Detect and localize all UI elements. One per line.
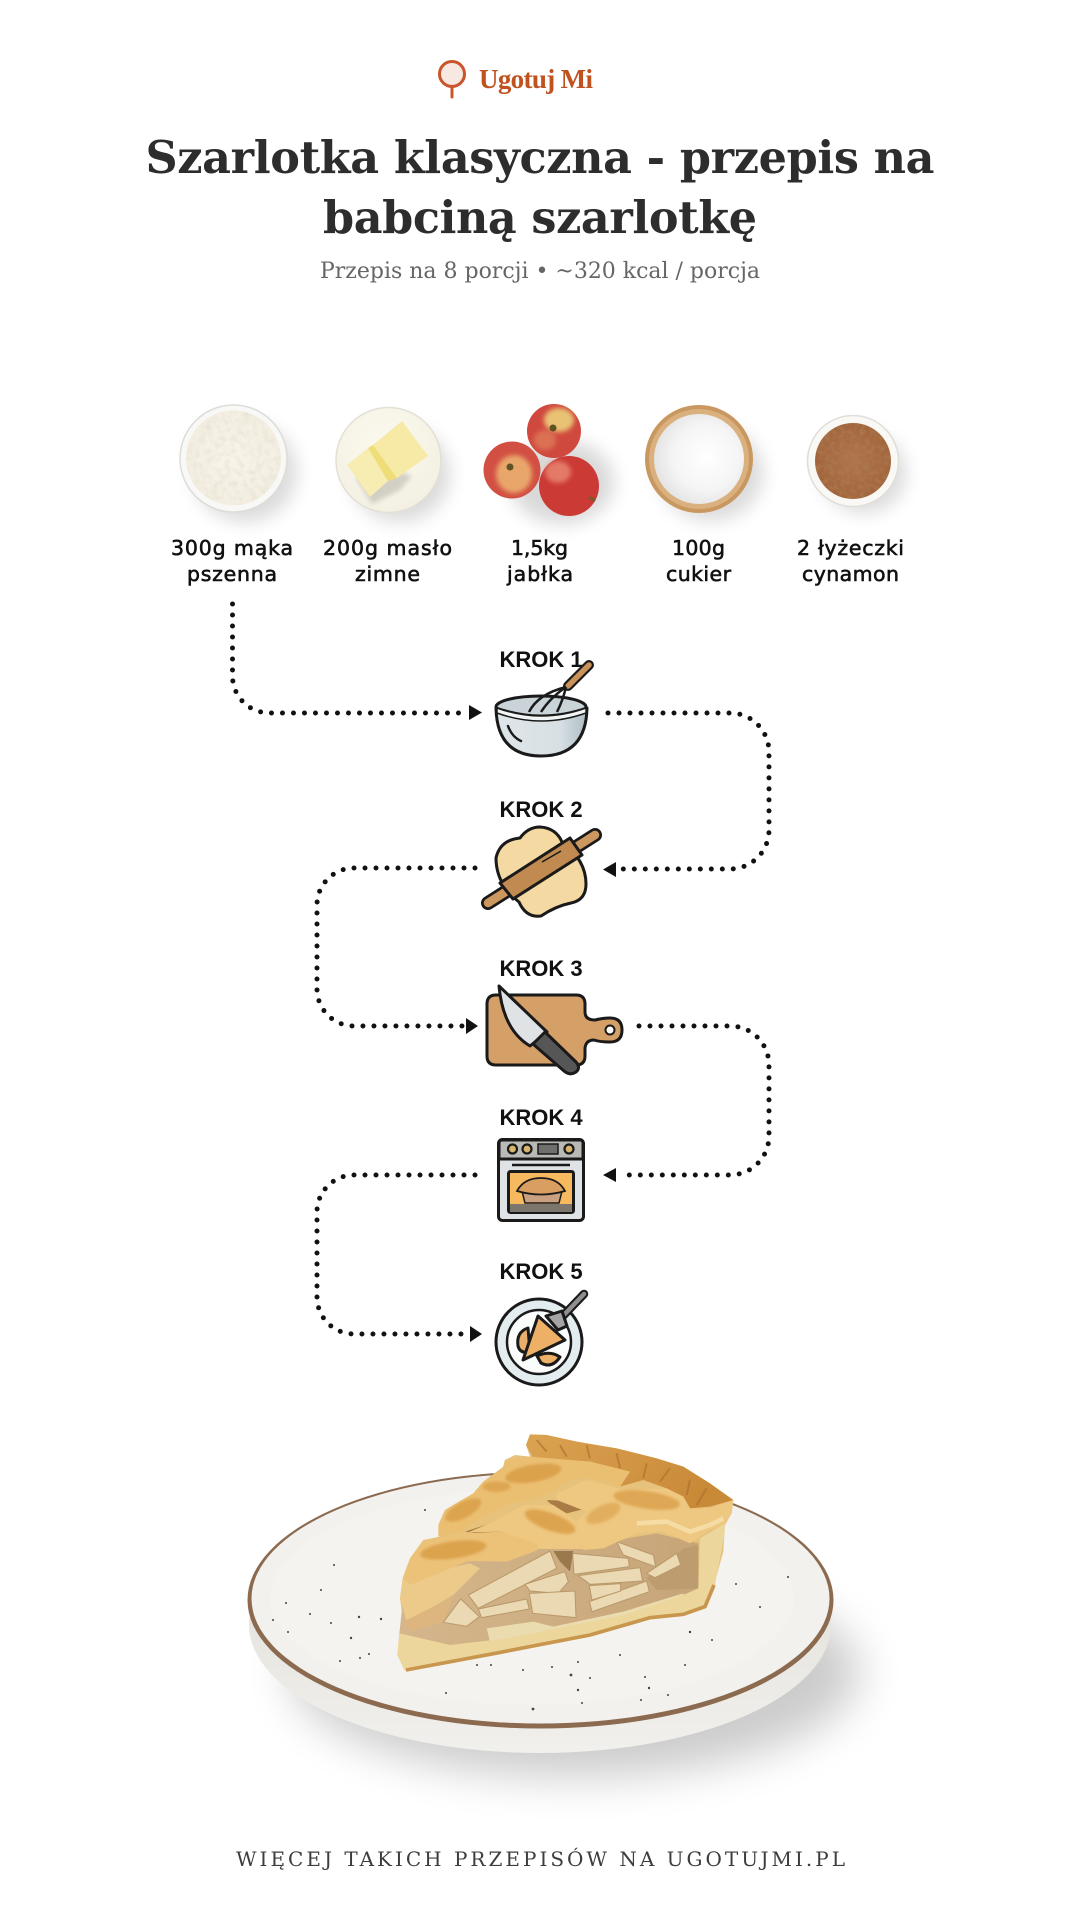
label: flour: pszenna <box>187 562 277 586</box>
icon: cutting board and knife <box>487 986 622 1074</box>
step 1 heading: KROK 1 <box>499 647 583 672</box>
lattice strip: right <box>557 1480 733 1550</box>
label: sugar: 100g <box>672 536 725 560</box>
step 2 heading: KROK 2 <box>499 797 583 822</box>
ingredient: cinnamon <box>797 416 906 586</box>
label: sugar: cukier <box>666 562 732 586</box>
lattice strip: front left <box>403 1532 538 1585</box>
icon: dough and rolling pin <box>488 827 595 916</box>
pie slice <box>397 1434 733 1671</box>
filling shade <box>647 1545 698 1590</box>
icon: bowl and whisk <box>496 665 589 756</box>
lattice strip: middle <box>438 1457 630 1537</box>
left side crust <box>400 1563 480 1622</box>
icon: plate with pie slice and fork <box>496 1294 584 1385</box>
right apple <box>539 456 599 516</box>
arrow: step 1 to step 2 <box>603 713 769 877</box>
ingredient: sugar <box>645 405 763 586</box>
arrow: step 3 to step 4 <box>603 1026 769 1182</box>
icon: logo spoon <box>440 62 464 97</box>
lattice gaps <box>547 1500 587 1513</box>
apple slices <box>443 1542 681 1626</box>
pale jam band <box>487 1593 685 1642</box>
title: babciną szarlotkę <box>323 192 757 244</box>
top apple <box>527 404 581 458</box>
step 4 heading: KROK 4 <box>499 1105 583 1130</box>
plate shadow <box>290 1567 860 1777</box>
apple filling <box>399 1533 698 1645</box>
step 2 <box>488 797 595 916</box>
arrow: step 2 to step 3 <box>317 868 478 1034</box>
finished pie on plate <box>248 1434 860 1777</box>
footer: WIĘCEJ TAKICH PRZEPISÓW NA UGOTUJMI.PL <box>236 1846 845 1871</box>
label: cinnamon: 2 łyżeczki <box>797 536 904 560</box>
ingredients row <box>171 404 906 586</box>
arrow: step 4 to step 5 <box>317 1175 482 1342</box>
label: apples: 1,5kg <box>511 536 568 560</box>
step 1 <box>496 647 589 756</box>
step 5 heading: KROK 5 <box>499 1259 583 1284</box>
label: butter: zimne <box>355 562 420 586</box>
crust silhouette <box>397 1434 733 1671</box>
label: apples: jabłka <box>506 562 573 586</box>
ingredient: apples <box>484 404 614 586</box>
golden highlights <box>419 1460 681 1563</box>
label: flour: 300g mąka <box>171 536 293 560</box>
label: butter: 200g masło <box>323 536 452 560</box>
back crust <box>526 1434 733 1508</box>
label: cinnamon: cynamon <box>802 562 899 586</box>
plate <box>248 1472 834 1753</box>
lattice strip: lower middle <box>468 1505 583 1549</box>
subtitle: Przepis na 8 porcji • ~320 kcal / porcja <box>320 259 760 284</box>
title: Szarlotka klasyczna - przepis na <box>146 132 934 184</box>
ingredient: flour <box>171 405 297 586</box>
bottom crust <box>397 1523 725 1671</box>
flow arrows <box>232 604 769 1342</box>
logo <box>440 62 593 97</box>
logo wordmark: Ugotuj Mi <box>479 64 593 94</box>
step 3 heading: KROK 3 <box>499 956 583 981</box>
arrow: ingredients to step 1 <box>232 604 482 720</box>
crumb edge <box>406 1585 714 1670</box>
pale crimp highlight <box>637 1518 723 1532</box>
step 5 <box>496 1259 584 1385</box>
step 3 <box>487 956 622 1074</box>
step 4 <box>498 1105 584 1220</box>
ingredient: butter <box>323 408 452 586</box>
icon: oven with pie <box>498 1140 584 1220</box>
left apple <box>484 442 540 498</box>
